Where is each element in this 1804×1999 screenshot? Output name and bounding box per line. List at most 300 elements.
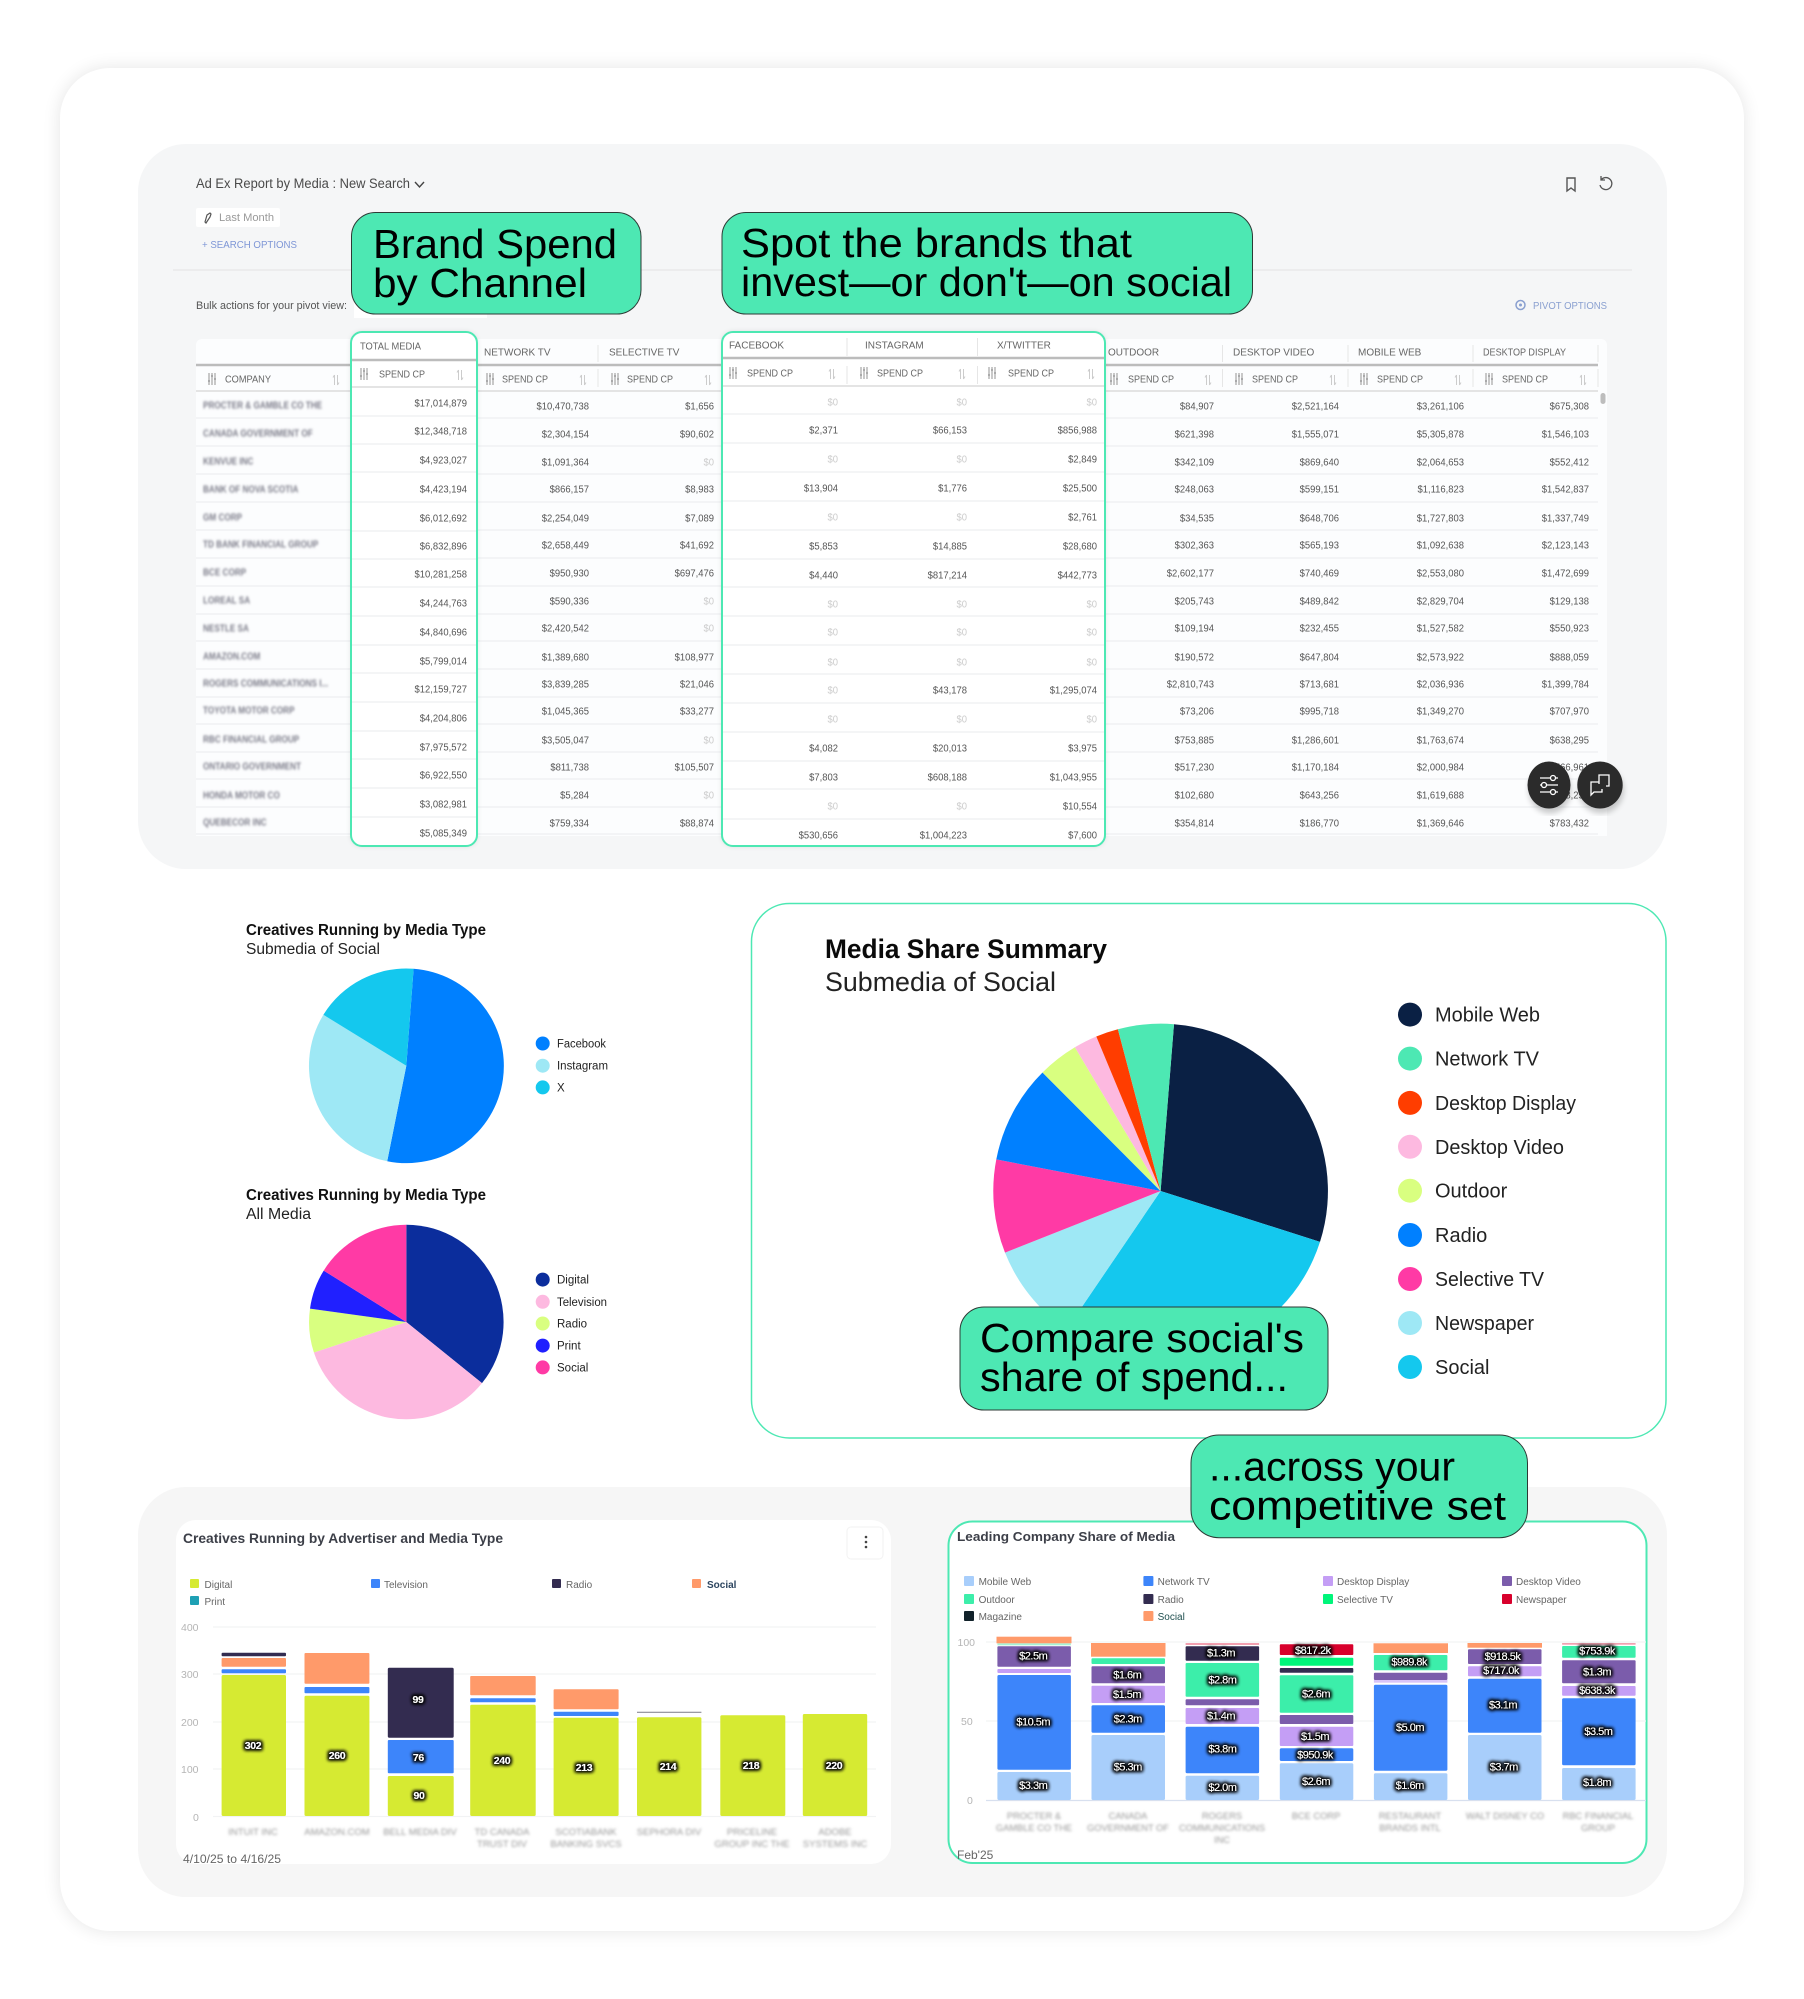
column: mobile web values: $1,619,688 — [1417, 790, 1464, 802]
company names (blurred): QUEBECOR INC — [203, 817, 267, 828]
column: outdoor values: $354,814 — [1175, 818, 1214, 830]
bar value labels: $3.8m — [1208, 1744, 1237, 1756]
legend — [536, 1273, 607, 1374]
highlight box: social columns: $43,178 — [933, 685, 967, 697]
heading: Creatives Running by Media Type — [246, 922, 486, 939]
column: mobile web values: $1,527,582 — [1417, 623, 1464, 635]
bulk actions label — [196, 290, 487, 318]
highlight box: total media column: $4,840,696 — [420, 627, 467, 639]
bar value labels: $1.3m — [1583, 1666, 1611, 1678]
y axis: 100 — [958, 1637, 975, 1649]
highlight box: total media column: $5,085,349 — [420, 828, 467, 840]
column: desktop video values: $995,718 — [1300, 706, 1339, 718]
legend: Social — [1435, 1357, 1489, 1379]
highlight box: social columns: $4,440 — [809, 570, 838, 582]
company names (blurred): ROGERS COMMUNICATIONS I... — [203, 678, 328, 689]
legend: Television — [384, 1580, 428, 1591]
highlight box: social columns: $66,153 — [933, 425, 967, 437]
x axis labels (blurred): ROGERS — [1202, 1811, 1242, 1821]
company names (blurred): BANK OF NOVA SCOTIA — [203, 484, 299, 495]
highlight box: social columns: $0 — [828, 685, 838, 697]
company names (blurred): BCE CORP — [203, 567, 246, 578]
highlight box: social columns: $1,004,223 — [920, 830, 967, 842]
bar value labels: $3.3m — [1019, 1780, 1048, 1792]
highlight box: social columns: FACEBOOK — [729, 340, 784, 352]
column headers: SPEND CP — [1252, 374, 1298, 386]
column headers: SPEND CP — [627, 374, 673, 386]
column: outdoor values: $2,810,743 — [1167, 679, 1214, 691]
column: desktop video values: $713,681 — [1300, 679, 1339, 691]
x axis labels (blurred): AMAZON.COM — [304, 1827, 370, 1838]
highlight box: social columns: $0 — [957, 599, 967, 611]
callout: brand spend by channel: by Channel — [373, 260, 587, 306]
column: outdoor values: $342,109 — [1175, 457, 1214, 469]
column: desktop video values: $643,256 — [1300, 790, 1339, 802]
company names (blurred): PROCTER & GAMBLE CO THE — [203, 400, 322, 411]
column: selective TV values: $8,983 — [685, 484, 714, 496]
column: network TV values: $1,091,364 — [542, 457, 589, 469]
column: mobile web values: $1,092,638 — [1417, 540, 1464, 552]
company names (blurred): TD BANK FINANCIAL GROUP — [203, 539, 318, 550]
company names (blurred): NESTLE SA — [203, 623, 249, 634]
bar value labels: $1.6m — [1396, 1780, 1424, 1792]
column: outdoor values — [1167, 401, 1214, 830]
x axis labels (blurred): PRICELINE — [727, 1827, 777, 1838]
bar value labels: 220 — [826, 1760, 843, 1772]
column: mobile web values — [1417, 401, 1464, 830]
column: selective TV values: $0 — [704, 596, 714, 608]
column: outdoor values: $302,363 — [1175, 540, 1214, 552]
legend — [1398, 1003, 1576, 1379]
bar value labels: $3.7m — [1490, 1761, 1518, 1773]
bar value labels: $950.9k — [1297, 1750, 1334, 1762]
company names (blurred): KENVUE INC — [203, 456, 254, 467]
x axis labels (blurred): BRANDS INTL — [1379, 1823, 1441, 1833]
column: network TV values: $866,157 — [550, 484, 589, 496]
x axis labels (blurred): COMMUNICATIONS — [1179, 1823, 1265, 1833]
bar value labels: $2.0m — [1208, 1782, 1237, 1794]
column: desktop video values: $186,770 — [1300, 818, 1339, 830]
legend: Outdoor — [1435, 1181, 1508, 1203]
highlight box: social columns: $0 — [828, 801, 838, 813]
legend: Magazine — [979, 1612, 1022, 1623]
x axis labels (blurred): TD CANADA — [475, 1827, 530, 1838]
bar value labels: 260 — [329, 1750, 346, 1762]
column: outdoor values: $109,194 — [1175, 623, 1214, 635]
panel: bottom charts background — [138, 1487, 1667, 1897]
table card — [196, 339, 1607, 836]
column: selective TV values: $108,977 — [675, 652, 714, 664]
x axis labels (blurred): RBC FINANCIAL — [1563, 1811, 1633, 1821]
callout: spot the brands: invest—or don't—on social — [741, 259, 1232, 305]
company names (blurred): HONDA MOTOR CO — [203, 790, 280, 801]
column: selective TV values: $90,602 — [680, 429, 714, 441]
column: selective TV values: $33,277 — [680, 706, 714, 718]
y axis: 50 — [961, 1716, 973, 1728]
highlight box: social columns: $0 — [1087, 627, 1097, 639]
column headers — [208, 348, 1586, 386]
legend: Mobile Web — [1435, 1005, 1540, 1027]
legend: Selective TV — [1337, 1595, 1393, 1606]
legend: Desktop Video — [1435, 1137, 1564, 1159]
column: outdoor values: $248,063 — [1175, 484, 1214, 496]
highlight box: social columns: $0 — [828, 397, 838, 409]
column: desktop display values: $552,412 — [1550, 457, 1589, 469]
column: mobile web values: $1,116,823 — [1417, 484, 1464, 496]
divider — [173, 269, 1632, 271]
column: desktop video values: $599,151 — [1300, 484, 1339, 496]
column: desktop video values: $565,193 — [1300, 540, 1339, 552]
scrollbar — [1600, 393, 1606, 404]
legend: X — [557, 1082, 565, 1094]
column headers: SPEND CP — [502, 374, 548, 386]
legend: Digital — [557, 1275, 589, 1287]
column: mobile web values: $1,727,803 — [1417, 513, 1464, 525]
x axis labels (blurred): INTUIT INC — [228, 1827, 278, 1838]
bar value labels: $2.6m — [1302, 1689, 1330, 1701]
legend: Facebook — [557, 1038, 606, 1050]
bar value labels — [245, 1694, 843, 1802]
column: desktop display values — [1542, 401, 1589, 830]
highlight box: social columns — [722, 332, 1105, 846]
x axis labels (blurred) — [996, 1811, 1633, 1845]
company names (blurred): LOREAL SA — [203, 595, 250, 606]
y axis: 100 — [181, 1764, 199, 1776]
column: selective TV values — [675, 401, 714, 830]
legend: Desktop Video — [1516, 1577, 1581, 1588]
floating button: filters — [1528, 762, 1572, 814]
bars: BCE — [1280, 1644, 1353, 1800]
highlight box: social columns: $0 — [1087, 397, 1097, 409]
icon: undo — [1600, 176, 1612, 190]
highlight box: social columns: $0 — [828, 627, 838, 639]
highlight box: social columns: $4,082 — [809, 743, 838, 755]
date filter pill: Last Month — [219, 212, 274, 224]
callout: compare social's share: Compare social's — [980, 1315, 1304, 1361]
legend: Television — [557, 1297, 607, 1309]
highlight box: social columns: $13,904 — [804, 483, 838, 495]
bar value labels: 90 — [413, 1790, 425, 1802]
column: desktop display values: $550,923 — [1550, 623, 1589, 635]
column: desktop video values: $2,521,164 — [1292, 401, 1339, 413]
column headers: SPEND CP — [1377, 374, 1423, 386]
bar value labels: 99 — [412, 1694, 424, 1706]
column: mobile web values: $2,064,653 — [1417, 457, 1464, 469]
x axis labels (blurred) — [228, 1827, 867, 1850]
column: desktop display values: $2,123,143 — [1542, 540, 1589, 552]
bar value labels: $10.5m — [1016, 1716, 1050, 1728]
y axis — [958, 1637, 1646, 1807]
callout: spot the brands: Spot the brands that — [741, 220, 1133, 266]
column: network TV values: $3,505,047 — [542, 735, 589, 747]
highlight box: total media column — [351, 332, 477, 846]
highlight box: social columns: INSTAGRAM — [865, 340, 924, 352]
legend: Radio — [1158, 1595, 1184, 1606]
column: outdoor values: $34,535 — [1180, 513, 1214, 525]
legend: Print — [204, 1597, 225, 1608]
column: desktop video values: $232,455 — [1300, 623, 1339, 635]
x axis labels (blurred): BCE CORP — [1292, 1811, 1340, 1821]
bar value labels: $817.2k — [1295, 1645, 1332, 1657]
legend: Radio — [566, 1580, 593, 1591]
bar value labels: $1.4m — [1207, 1710, 1235, 1722]
highlight box: social columns: SPEND CP — [747, 368, 793, 380]
x axis labels (blurred): WALT DISNEY CO — [1466, 1811, 1544, 1821]
bar value labels: $3.5m — [1584, 1726, 1613, 1738]
highlight box: total media column: $4,923,027 — [420, 455, 467, 467]
highlight box: total media column: $17,014,879 — [415, 398, 467, 410]
column: mobile web values: $2,036,936 — [1417, 679, 1464, 691]
column headers: SPEND CP — [1128, 374, 1174, 386]
column: outdoor values: $2,602,177 — [1167, 568, 1214, 580]
highlight box: social columns: $0 — [957, 714, 967, 726]
column: desktop display values: $129,138 — [1550, 596, 1589, 608]
column: desktop video values: $1,555,071 — [1292, 429, 1339, 441]
x axis labels (blurred): GROUP — [1581, 1823, 1615, 1833]
bar value labels: $1.5m — [1301, 1731, 1329, 1743]
bar value labels: 213 — [576, 1762, 593, 1774]
column: outdoor values: $84,907 — [1180, 401, 1214, 413]
highlight box: social columns: $0 — [828, 714, 838, 726]
column headers: NETWORK TV — [484, 348, 551, 358]
x axis labels (blurred): CANADA — [1109, 1811, 1148, 1821]
column: desktop video values: $647,804 — [1300, 652, 1339, 664]
panel: creatives by advertiser bar chart — [176, 1520, 891, 1866]
column: network TV values: $2,658,449 — [542, 540, 589, 552]
icon: bookmark — [1567, 178, 1575, 191]
column: network TV values: $759,334 — [550, 818, 589, 830]
column: desktop video values: $1,170,184 — [1292, 762, 1339, 774]
column headers: MOBILE WEB — [1358, 348, 1422, 358]
highlight box: social columns: $0 — [1087, 599, 1097, 611]
column headers: DESKTOP VIDEO — [1233, 348, 1315, 358]
column: desktop display values: $1,546,103 — [1542, 429, 1589, 441]
highlight box: total media column: $10,281,258 — [415, 569, 467, 581]
highlight box: social columns: $0 — [957, 627, 967, 639]
pie chart — [993, 1024, 1328, 1358]
heading: All Media — [246, 1206, 311, 1223]
column: selective TV values: $1,656 — [685, 401, 714, 413]
bulk actions label: Bulk actions for your pivot view: — [196, 300, 347, 312]
legend: Network TV — [1435, 1049, 1540, 1071]
highlight box: social columns: $14,885 — [933, 541, 967, 553]
column: network TV values: $1,045,365 — [542, 706, 589, 718]
highlight box: social columns: $0 — [957, 397, 967, 409]
pivot options link: PIVOT OPTIONS — [1533, 300, 1607, 312]
date range: 4/10/25 to 4/16/25 — [183, 1852, 281, 1866]
x axis labels (blurred): TRUST DIV — [477, 1839, 528, 1850]
column: desktop video values: $648,706 — [1300, 513, 1339, 525]
column: selective TV values: $88,874 — [680, 818, 714, 830]
column: mobile web values: $5,305,878 — [1417, 429, 1464, 441]
bar value labels: $638.3k — [1579, 1685, 1616, 1697]
column: selective TV values: $0 — [704, 623, 714, 635]
highlight box: social columns: $856,988 — [1058, 425, 1097, 437]
highlight box: social columns: $25,500 — [1063, 483, 1097, 495]
bar value labels: $2.3m — [1114, 1713, 1142, 1725]
highlight box: social columns: $817,214 — [928, 570, 967, 582]
bars: RBC — [1562, 1643, 1636, 1800]
highlight box: social columns: $5,853 — [809, 541, 838, 553]
legend: Print — [557, 1341, 581, 1353]
x axis labels (blurred): RESTAURANT — [1379, 1811, 1441, 1821]
highlight box: social columns: $0 — [957, 512, 967, 524]
chart block: creatives submedia of social — [246, 922, 608, 1163]
x axis labels (blurred): BELL MEDIA DIV — [383, 1827, 457, 1838]
highlight box: social columns: $2,849 — [1068, 454, 1097, 466]
highlight box: social columns: $28,680 — [1063, 541, 1097, 553]
callout: compare social's share — [960, 1307, 1328, 1410]
legend: Radio — [557, 1318, 587, 1330]
column: selective TV values: $21,046 — [680, 679, 714, 691]
bar value labels: $753.9k — [1579, 1646, 1616, 1658]
bar value labels: $2.8m — [1208, 1674, 1237, 1686]
highlight box: social columns: $530,656 — [799, 830, 838, 842]
y axis: 200 — [181, 1717, 199, 1729]
callout: across your competitive set: ...across your — [1209, 1444, 1455, 1490]
highlight box: social columns: $442,773 — [1058, 570, 1097, 582]
heading: Submedia of Social — [246, 941, 380, 958]
bar value labels: $5.3m — [1114, 1761, 1142, 1773]
x axis labels (blurred): BANKING SVCS — [550, 1839, 622, 1850]
column: desktop display values: $1,399,784 — [1542, 679, 1589, 691]
legend: Social — [1158, 1612, 1185, 1623]
column: outdoor values: $102,680 — [1175, 790, 1214, 802]
column: mobile web values: $3,261,106 — [1417, 401, 1464, 413]
highlight box: total media column: $6,012,692 — [420, 513, 467, 525]
column: mobile web values: $1,369,646 — [1417, 818, 1464, 830]
bar value labels: $989.8k — [1391, 1657, 1428, 1669]
report title: Ad Ex Report by Media : New Search — [196, 176, 410, 191]
column: network TV values: $2,254,049 — [542, 513, 589, 525]
highlight box: social columns: $1,295,074 — [1050, 685, 1097, 697]
highlight box: total media column: $12,159,727 — [415, 684, 467, 696]
column: network TV values: $1,389,680 — [542, 652, 589, 664]
bar value labels: 240 — [494, 1755, 511, 1767]
bar value labels: $5.0m — [1396, 1722, 1424, 1734]
legend: Radio — [1435, 1225, 1487, 1247]
column: network TV values: $3,839,285 — [542, 679, 589, 691]
column: network TV values: $5,284 — [560, 790, 589, 802]
chart title: Creatives Running by Advertiser and Media Type — [183, 1531, 504, 1546]
column: desktop display values: $888,059 — [1550, 652, 1589, 664]
column headers: DESKTOP DISPLAY — [1483, 348, 1566, 358]
column: desktop video values: $489,842 — [1300, 596, 1339, 608]
bar value labels: $1.5m — [1113, 1689, 1141, 1701]
column: outdoor values: $73,206 — [1180, 706, 1214, 718]
highlight box: social columns: $0 — [828, 657, 838, 669]
column: desktop display values: $707,970 — [1550, 706, 1589, 718]
highlight box: total media column: $6,922,550 — [420, 770, 467, 782]
company names (blurred): ONTARIO GOVERNMENT — [203, 761, 301, 772]
legend: Desktop Display — [1337, 1577, 1409, 1588]
highlight box: social columns: SPEND CP — [877, 368, 923, 380]
bar value labels: 218 — [743, 1760, 760, 1772]
legend — [964, 1576, 1581, 1623]
bar value labels: $1.6m — [1113, 1669, 1142, 1681]
heading — [246, 922, 486, 958]
chart block: creatives all media — [246, 1187, 607, 1419]
bar value labels: 76 — [413, 1752, 424, 1764]
highlight box: social columns: $0 — [957, 454, 967, 466]
column: desktop video values: $740,469 — [1300, 568, 1339, 580]
bar value labels: $918.5k — [1485, 1651, 1521, 1663]
column: selective TV values: $41,692 — [680, 540, 714, 552]
highlight box: total media column: $12,348,718 — [415, 426, 467, 438]
highlight box: social columns: $7,600 — [1068, 830, 1097, 842]
column headers: SELECTIVE TV — [609, 348, 680, 358]
column headers: SPEND CP — [1502, 374, 1548, 386]
column: network TV values: $950,930 — [550, 568, 589, 580]
legend: Instagram — [557, 1061, 608, 1073]
column: mobile web values: $2,553,080 — [1417, 568, 1464, 580]
column: selective TV values: $105,507 — [675, 762, 714, 774]
highlight box: total media column: TOTAL MEDIA — [360, 342, 421, 352]
highlight box: total media column: $4,244,763 — [420, 598, 467, 610]
highlight box: total media column: $5,799,014 — [420, 656, 467, 668]
bars: Restaurant Brands — [1374, 1643, 1448, 1800]
column: desktop display values: $566,961 — [1550, 762, 1589, 774]
column: network TV values: $811,738 — [550, 762, 589, 774]
highlight box: social columns: $1,043,955 — [1050, 772, 1097, 784]
highlight box: social columns: $0 — [828, 454, 838, 466]
column: selective TV values: $0 — [704, 735, 714, 747]
company names (blurred): GM CORP — [203, 512, 242, 523]
bar value labels: $2.6m — [1302, 1776, 1330, 1788]
x axis labels (blurred): SYSTEMS INC — [803, 1839, 867, 1850]
x axis labels (blurred): PROCTER & — [1007, 1811, 1062, 1821]
legend: Newspaper — [1516, 1595, 1567, 1606]
bars — [222, 1653, 867, 1816]
highlight box: total media column: SPEND CP — [379, 370, 425, 380]
column: desktop video values — [1292, 401, 1339, 830]
company names (blurred): TOYOTA MOTOR CORP — [203, 705, 295, 716]
bars: Procter and Gamble — [996, 1637, 1072, 1800]
legend: Social — [557, 1362, 588, 1374]
heading: Submedia of Social — [825, 967, 1056, 997]
highlight box: total media column: $6,832,896 — [420, 541, 467, 553]
highlight box: total media column: $4,423,194 — [420, 484, 467, 496]
column headers: COMPANY — [225, 374, 271, 386]
column: desktop display values: $1,542,837 — [1542, 484, 1589, 496]
x axis labels (blurred): GOVERNMENT OF — [1087, 1823, 1169, 1833]
bar value labels: $2.5m — [1019, 1651, 1048, 1663]
date filter pill — [196, 208, 280, 227]
column: outdoor values: $753,885 — [1175, 735, 1214, 747]
column: selective TV values: $697,476 — [675, 568, 714, 580]
column: desktop display values: $675,308 — [1550, 401, 1589, 413]
y axis: 300 — [181, 1669, 199, 1681]
column: desktop display values: $783,432 — [1550, 818, 1589, 830]
bar value labels: $1.3m — [1207, 1648, 1235, 1660]
callout: brand spend by channel: Brand Spend — [373, 221, 617, 267]
highlight box: social columns: $1,776 — [938, 483, 967, 495]
legend: Outdoor — [979, 1595, 1015, 1606]
y axis — [181, 1622, 876, 1824]
y axis: 0 — [967, 1795, 973, 1807]
legend: Network TV — [1158, 1577, 1210, 1588]
y axis: 0 — [193, 1812, 199, 1824]
company names (blurred): AMAZON.COM — [203, 651, 260, 662]
column: selective TV values: $0 — [704, 790, 714, 802]
heading: Media Share Summary — [825, 934, 1107, 964]
heading: Creatives Running by Media Type — [246, 1187, 486, 1204]
panel: Ad Ex report table — [138, 144, 1667, 869]
column: desktop video values: $869,640 — [1300, 457, 1339, 469]
column: outdoor values: $205,743 — [1175, 596, 1214, 608]
x axis labels (blurred): GAMBLE CO THE — [996, 1823, 1072, 1833]
legend — [536, 1036, 608, 1094]
